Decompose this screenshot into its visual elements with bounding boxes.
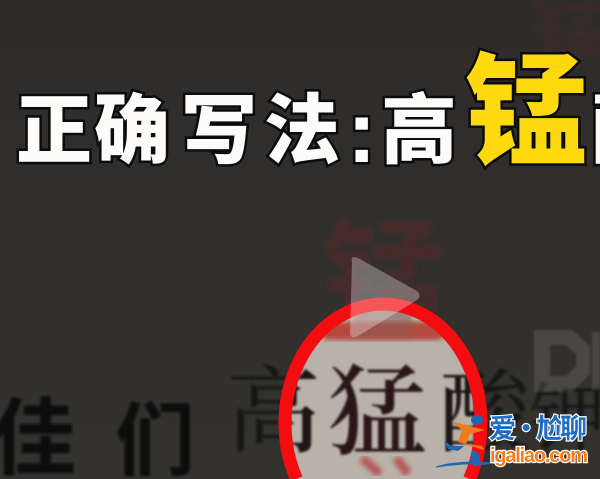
circled area with highlighted character (278, 298, 488, 479)
icon: watermark runner logo (436, 415, 505, 467)
watermark text: site name: 爱·尬聊 (489, 407, 587, 446)
handwritten chemical name (226, 336, 600, 471)
title: correct spelling: : (347, 82, 376, 180)
circled area with highlighted character: 高 (226, 336, 320, 471)
title: correct spelling: 法 (264, 89, 340, 174)
title: correct spelling: 高 (381, 89, 457, 174)
handwritten chemical name: 酸 (440, 340, 531, 470)
title: correct spelling (16, 45, 600, 180)
handwriting, lower left (0, 372, 195, 479)
handwritten chemical name: 高 (226, 336, 320, 471)
title: correct spelling: 确 (94, 89, 170, 174)
circled area with highlighted character: 猛 (328, 334, 426, 475)
icon: play button (350, 257, 420, 337)
title: correct spelling: 锰 (465, 45, 587, 180)
title: correct spelling: 写 (181, 89, 257, 174)
title: correct spelling: 正 (16, 89, 92, 174)
faded red character, centre: 锰 (322, 178, 446, 358)
circled area with highlighted character: 酸 (440, 340, 533, 470)
pixelated watermark (534, 330, 600, 392)
watermark text: domain: igaliao.com (490, 445, 588, 467)
